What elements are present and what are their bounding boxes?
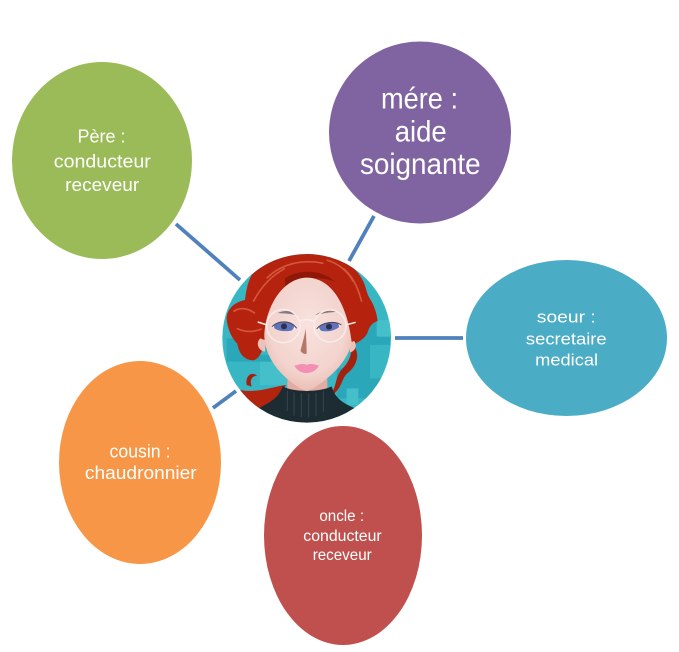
background <box>220 252 393 425</box>
hair shading <box>285 272 335 287</box>
bubble: cousin <box>59 361 221 564</box>
connector: sister <box>395 336 463 340</box>
ponytail <box>240 385 286 408</box>
bubble: mother: mére : <box>381 82 458 115</box>
bubble: father: conducteur <box>54 150 151 172</box>
ears <box>258 338 356 352</box>
bubble: mother: aide <box>395 116 447 149</box>
bubble: sister <box>466 260 667 416</box>
bubble: cousin: cousin : <box>110 441 170 461</box>
bubble: mother: soignante <box>360 148 481 181</box>
bubble: sister: soeur : <box>537 307 596 326</box>
avatar portrait <box>220 252 393 432</box>
neck <box>287 378 328 391</box>
connector: father <box>176 224 240 280</box>
connector: mother <box>349 216 374 261</box>
curled lock <box>333 348 358 394</box>
bubble: uncle: oncle : <box>319 508 364 525</box>
connector: cousin <box>213 391 236 408</box>
eyes <box>272 326 296 332</box>
bubble: uncle: receveur <box>313 547 372 564</box>
bubble: mother <box>329 42 511 224</box>
bubble: uncle: conducteur <box>303 528 382 545</box>
glasses <box>258 309 356 343</box>
bubble: uncle <box>264 426 422 645</box>
face <box>264 278 352 391</box>
bubble: sister: secretaire <box>526 329 607 348</box>
sweater <box>259 386 354 423</box>
hair <box>227 254 378 360</box>
bubble: father: receveur <box>65 174 139 195</box>
bubble: cousin: chaudronnier <box>85 463 197 483</box>
lips <box>294 364 319 373</box>
bubble: father <box>12 62 192 259</box>
eyebrows <box>278 310 339 316</box>
bubble: sister: medical <box>535 351 598 370</box>
nose <box>301 328 307 354</box>
bubble: father: Père : <box>78 126 126 147</box>
